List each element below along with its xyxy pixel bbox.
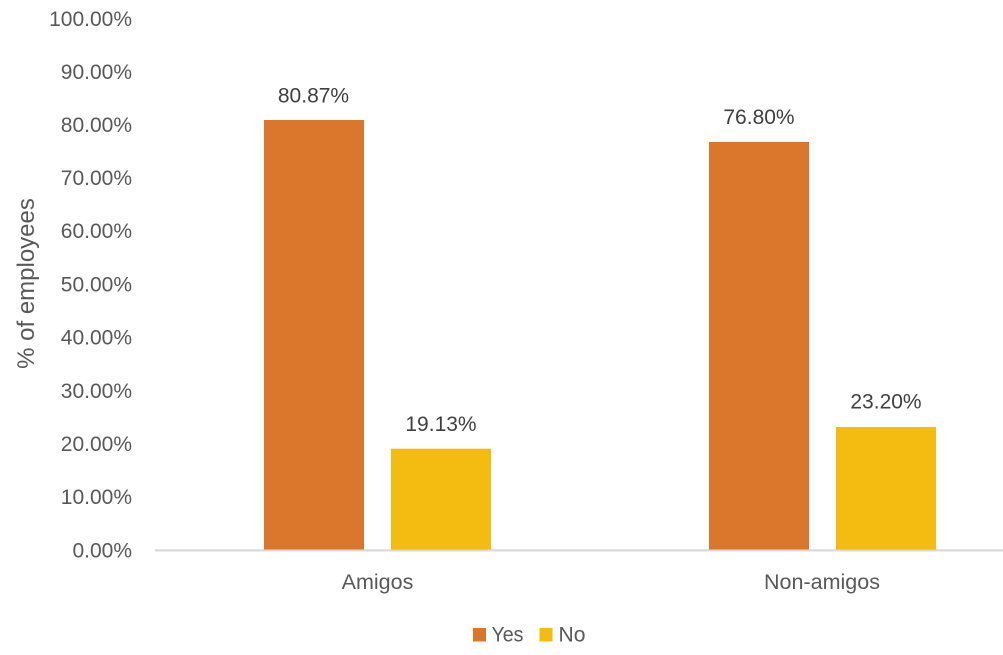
bar: Non-amigos No xyxy=(836,427,936,550)
y axis tick labels: 70.00% xyxy=(61,167,132,190)
legend: No xyxy=(558,624,586,646)
y axis tick labels: 30.00% xyxy=(61,380,132,403)
y axis title: % of employees xyxy=(13,198,40,369)
y axis tick labels: 0.00% xyxy=(72,540,132,562)
data labels xyxy=(278,84,922,436)
data labels: 23.20% xyxy=(850,391,922,414)
y axis tick labels: 60.00% xyxy=(61,220,132,243)
x axis category labels: Non-amigos xyxy=(764,570,880,594)
data labels: 80.87% xyxy=(278,84,349,108)
legend: Yes xyxy=(492,624,524,646)
y axis tick labels: 20.00% xyxy=(61,433,132,456)
x axis category labels xyxy=(342,570,880,594)
y axis tick labels: 80.00% xyxy=(61,114,132,137)
y axis tick labels: 50.00% xyxy=(61,274,132,296)
y axis tick labels: 90.00% xyxy=(61,61,132,84)
x axis category labels: Amigos xyxy=(342,570,413,594)
legend xyxy=(473,624,586,646)
bar: Amigos Yes xyxy=(264,120,364,550)
data labels: 76.80% xyxy=(723,106,795,129)
bar: Non-amigos Yes xyxy=(709,142,809,550)
x axis line xyxy=(155,549,1003,552)
y axis tick labels: 10.00% xyxy=(61,486,132,509)
data labels: 19.13% xyxy=(405,413,477,436)
y axis tick labels: 100.00% xyxy=(49,8,132,31)
y axis tick labels: 40.00% xyxy=(61,326,132,350)
bar: Amigos No xyxy=(391,449,491,550)
y axis tick labels xyxy=(49,8,132,562)
